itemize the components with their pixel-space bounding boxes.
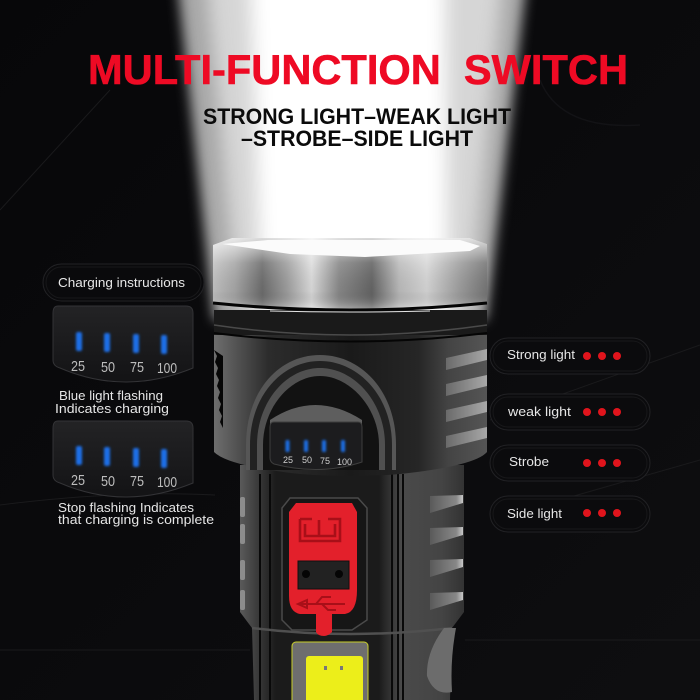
usb symbol <box>298 597 345 610</box>
caption: charging <box>55 388 169 416</box>
small battery display <box>270 422 362 470</box>
battery card: complete: 100 <box>157 474 177 491</box>
red power switch and USB cover <box>289 503 357 636</box>
mode: strobe: Strobe <box>509 454 549 469</box>
subtitle: STRONG LIGHT–WEAK LIGHT <box>203 104 512 129</box>
battery card: complete: 50 <box>101 473 115 490</box>
battery card: charging: 75 <box>130 359 144 376</box>
mode: side light <box>490 496 650 532</box>
small battery display: 50 <box>302 455 312 465</box>
pill: charging instructions <box>43 264 204 301</box>
mode: strobe <box>490 445 650 481</box>
battery card: charging: 100 <box>157 360 177 377</box>
battery card: charging: 25 <box>71 358 85 375</box>
flashlight body <box>214 310 487 476</box>
pill: charging instructions: Charging instructions <box>58 275 186 290</box>
battery card: complete: 25 <box>71 472 85 489</box>
caption: complete <box>58 500 214 527</box>
arch indicator panel <box>246 355 396 470</box>
small battery display: 25 <box>283 455 293 465</box>
small battery display: 75 <box>320 456 330 466</box>
battery card: charging <box>53 306 193 382</box>
battery card: charging: 50 <box>101 359 115 376</box>
mode: side light: Side light <box>507 506 562 521</box>
lens rim and bezel <box>213 238 487 312</box>
mode: weak light: weak light <box>507 404 571 419</box>
caption: complete: Stop flashing Indicates <box>58 500 195 515</box>
panel: light modes <box>490 338 650 532</box>
panel: charging instructions <box>43 264 214 527</box>
light beam <box>176 0 528 320</box>
caption: charging: Indicates charging <box>55 401 169 416</box>
switch recess <box>282 498 367 630</box>
mode: weak light <box>490 394 650 430</box>
caption: complete: that charging is complete <box>58 512 214 527</box>
battery card: complete <box>53 421 193 497</box>
mode: strong light <box>490 338 650 374</box>
battery card: complete: 75 <box>130 473 144 490</box>
subtitle: –STROBE–SIDE LIGHT <box>241 126 474 151</box>
subtitle <box>203 104 512 151</box>
caption: charging: Blue light flashing <box>59 388 163 403</box>
title: MULTI-FUNCTION SWITCH <box>88 46 628 93</box>
power symbol <box>300 519 340 541</box>
COB side light <box>292 642 368 700</box>
small battery display: 100 <box>337 457 352 467</box>
grip thumb <box>427 628 456 693</box>
mode: strong light: Strong light <box>507 347 575 362</box>
flashlight handle <box>240 465 464 700</box>
